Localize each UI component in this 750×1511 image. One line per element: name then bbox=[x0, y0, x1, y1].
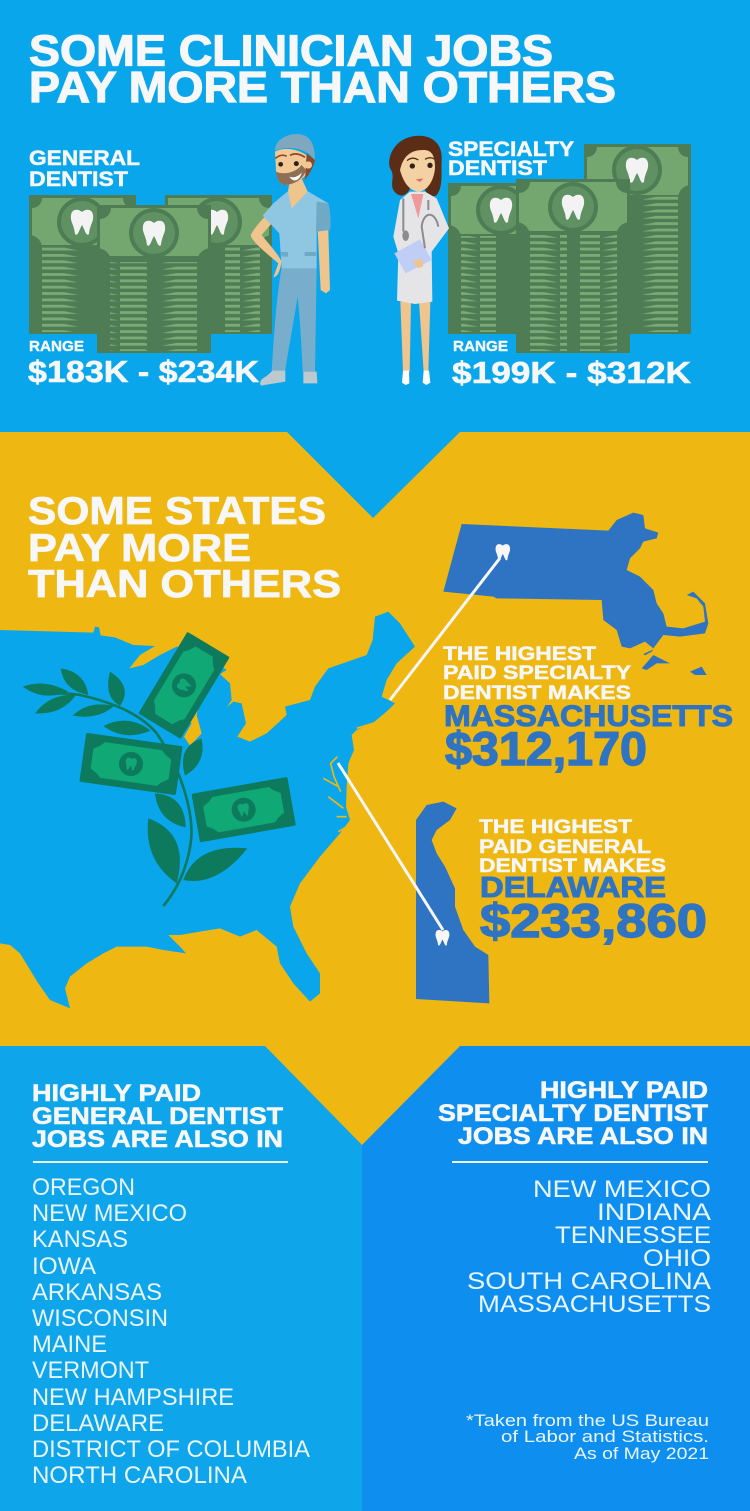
heading: HIGHLY PAID bbox=[540, 1077, 708, 1104]
callout: highest paid specialty dentist: THE HIGHEST bbox=[443, 643, 596, 665]
callout: highest paid general dentist: DELAWARE bbox=[480, 872, 666, 904]
state list: INDIANA bbox=[597, 1199, 712, 1226]
money stack: left bbox=[29, 195, 136, 334]
state list: TENNESSEE bbox=[555, 1222, 711, 1249]
panel: top blue section bbox=[0, 0, 750, 518]
callout: highest paid general dentist: $233,860 bbox=[480, 894, 707, 947]
callout: highest paid general dentist: PAID GENERAL bbox=[479, 836, 651, 858]
panel: specialty dentist list bbox=[362, 1046, 750, 1511]
heading bbox=[438, 1077, 708, 1150]
lake michigan bbox=[180, 700, 202, 746]
state list bbox=[467, 1176, 712, 1318]
heading: states: PAY MORE bbox=[28, 527, 251, 570]
figure: female dentist bbox=[389, 136, 449, 385]
heading: SPECIALTY DENTIST bbox=[438, 1100, 708, 1127]
chesapeake and coastal inlets bbox=[323, 723, 375, 832]
money stack: back left bbox=[448, 183, 516, 334]
map: Massachusetts bbox=[443, 513, 708, 675]
state list: DISTRICT OF COLUMBIA bbox=[32, 1436, 310, 1463]
map: eastern United States bbox=[0, 612, 415, 1008]
footnote: *Taken from the US Bureau bbox=[466, 1411, 709, 1430]
label: specialty dentist bbox=[448, 138, 574, 180]
state list: NEW HAMPSHIRE bbox=[32, 1384, 234, 1411]
state list: SOUTH CAROLINA bbox=[467, 1268, 712, 1295]
money stack: centre bbox=[97, 205, 211, 353]
heading: HIGHLY PAID bbox=[32, 1080, 201, 1107]
heading: JOBS ARE ALSO IN bbox=[458, 1123, 708, 1150]
panel: general dentist bbox=[16, 134, 330, 389]
state list: NEW MEXICO bbox=[533, 1176, 711, 1203]
callout: highest paid general dentist: DENTIST MAKES bbox=[479, 855, 666, 877]
label: general dentist: GENERAL bbox=[29, 147, 140, 170]
state list: IOWA bbox=[32, 1253, 96, 1280]
state list: DELAWARE bbox=[32, 1410, 164, 1437]
illustration: money branch bbox=[23, 632, 296, 906]
label: specialty dentist: DENTIST bbox=[448, 157, 547, 180]
footnote: As of May 2021 bbox=[574, 1444, 709, 1463]
bill bbox=[191, 777, 296, 842]
money stack: centre bbox=[516, 179, 630, 353]
callout: highest paid specialty dentist bbox=[443, 643, 733, 775]
salary range: $199K - $312K bbox=[452, 355, 692, 390]
footnote bbox=[466, 1411, 709, 1463]
map: Delaware bbox=[416, 802, 489, 1003]
heading: states: THAN OTHERS bbox=[28, 563, 341, 606]
figure: male dentist bbox=[251, 134, 330, 386]
state list: KANSAS bbox=[32, 1226, 128, 1253]
callout: highest paid general dentist: THE HIGHEST bbox=[479, 816, 632, 838]
footnote: of Labor and Statistics. bbox=[501, 1427, 709, 1446]
salary range: $183K - $234K bbox=[28, 355, 259, 389]
money stack: back right bbox=[584, 144, 691, 334]
heading: states bbox=[28, 490, 341, 606]
state list: VERMONT bbox=[32, 1357, 149, 1384]
money stack: right bbox=[165, 195, 272, 334]
label: general dentist bbox=[29, 147, 140, 191]
state list: MASSACHUSETTS bbox=[478, 1291, 711, 1318]
heading: states: SOME STATES bbox=[28, 490, 326, 533]
label: specialty dentist: SPECIALTY bbox=[448, 138, 574, 161]
callout: highest paid specialty dentist: DENTIST MAKES bbox=[443, 682, 631, 704]
range label: RANGE bbox=[453, 339, 508, 355]
state list: MAINE bbox=[32, 1331, 107, 1358]
state list: NEW MEXICO bbox=[32, 1200, 187, 1227]
state list: OHIO bbox=[643, 1245, 711, 1272]
title: PAY MORE THAN OTHERS bbox=[29, 63, 616, 112]
title bbox=[29, 26, 616, 112]
heading bbox=[32, 1080, 283, 1153]
callout: highest paid specialty dentist: PAID SPECIALTY bbox=[443, 662, 631, 684]
bill bbox=[79, 733, 183, 795]
label: general dentist: DENTIST bbox=[29, 168, 128, 191]
state list: ARKANSAS bbox=[32, 1279, 162, 1306]
heading: GENERAL DENTIST bbox=[32, 1103, 283, 1130]
range label: RANGE bbox=[29, 339, 84, 355]
callout: highest paid specialty dentist: MASSACHUSETTS bbox=[444, 700, 733, 733]
state list bbox=[32, 1174, 310, 1489]
panel: general dentist list bbox=[0, 1046, 362, 1511]
title: SOME CLINICIAN JOBS bbox=[29, 26, 553, 76]
state list: WISCONSIN bbox=[32, 1305, 168, 1332]
callout: highest paid general dentist bbox=[479, 816, 707, 947]
arrow: map to Massachusetts bbox=[390, 544, 510, 700]
bill bbox=[138, 632, 230, 739]
heading: JOBS ARE ALSO IN bbox=[32, 1126, 283, 1153]
arrow: map to Delaware bbox=[338, 763, 449, 946]
state list: OREGON bbox=[32, 1174, 135, 1201]
state list: NORTH CAROLINA bbox=[32, 1462, 247, 1489]
callout: highest paid specialty dentist: $312,170 bbox=[445, 722, 647, 775]
panel: specialty dentist bbox=[389, 136, 704, 390]
